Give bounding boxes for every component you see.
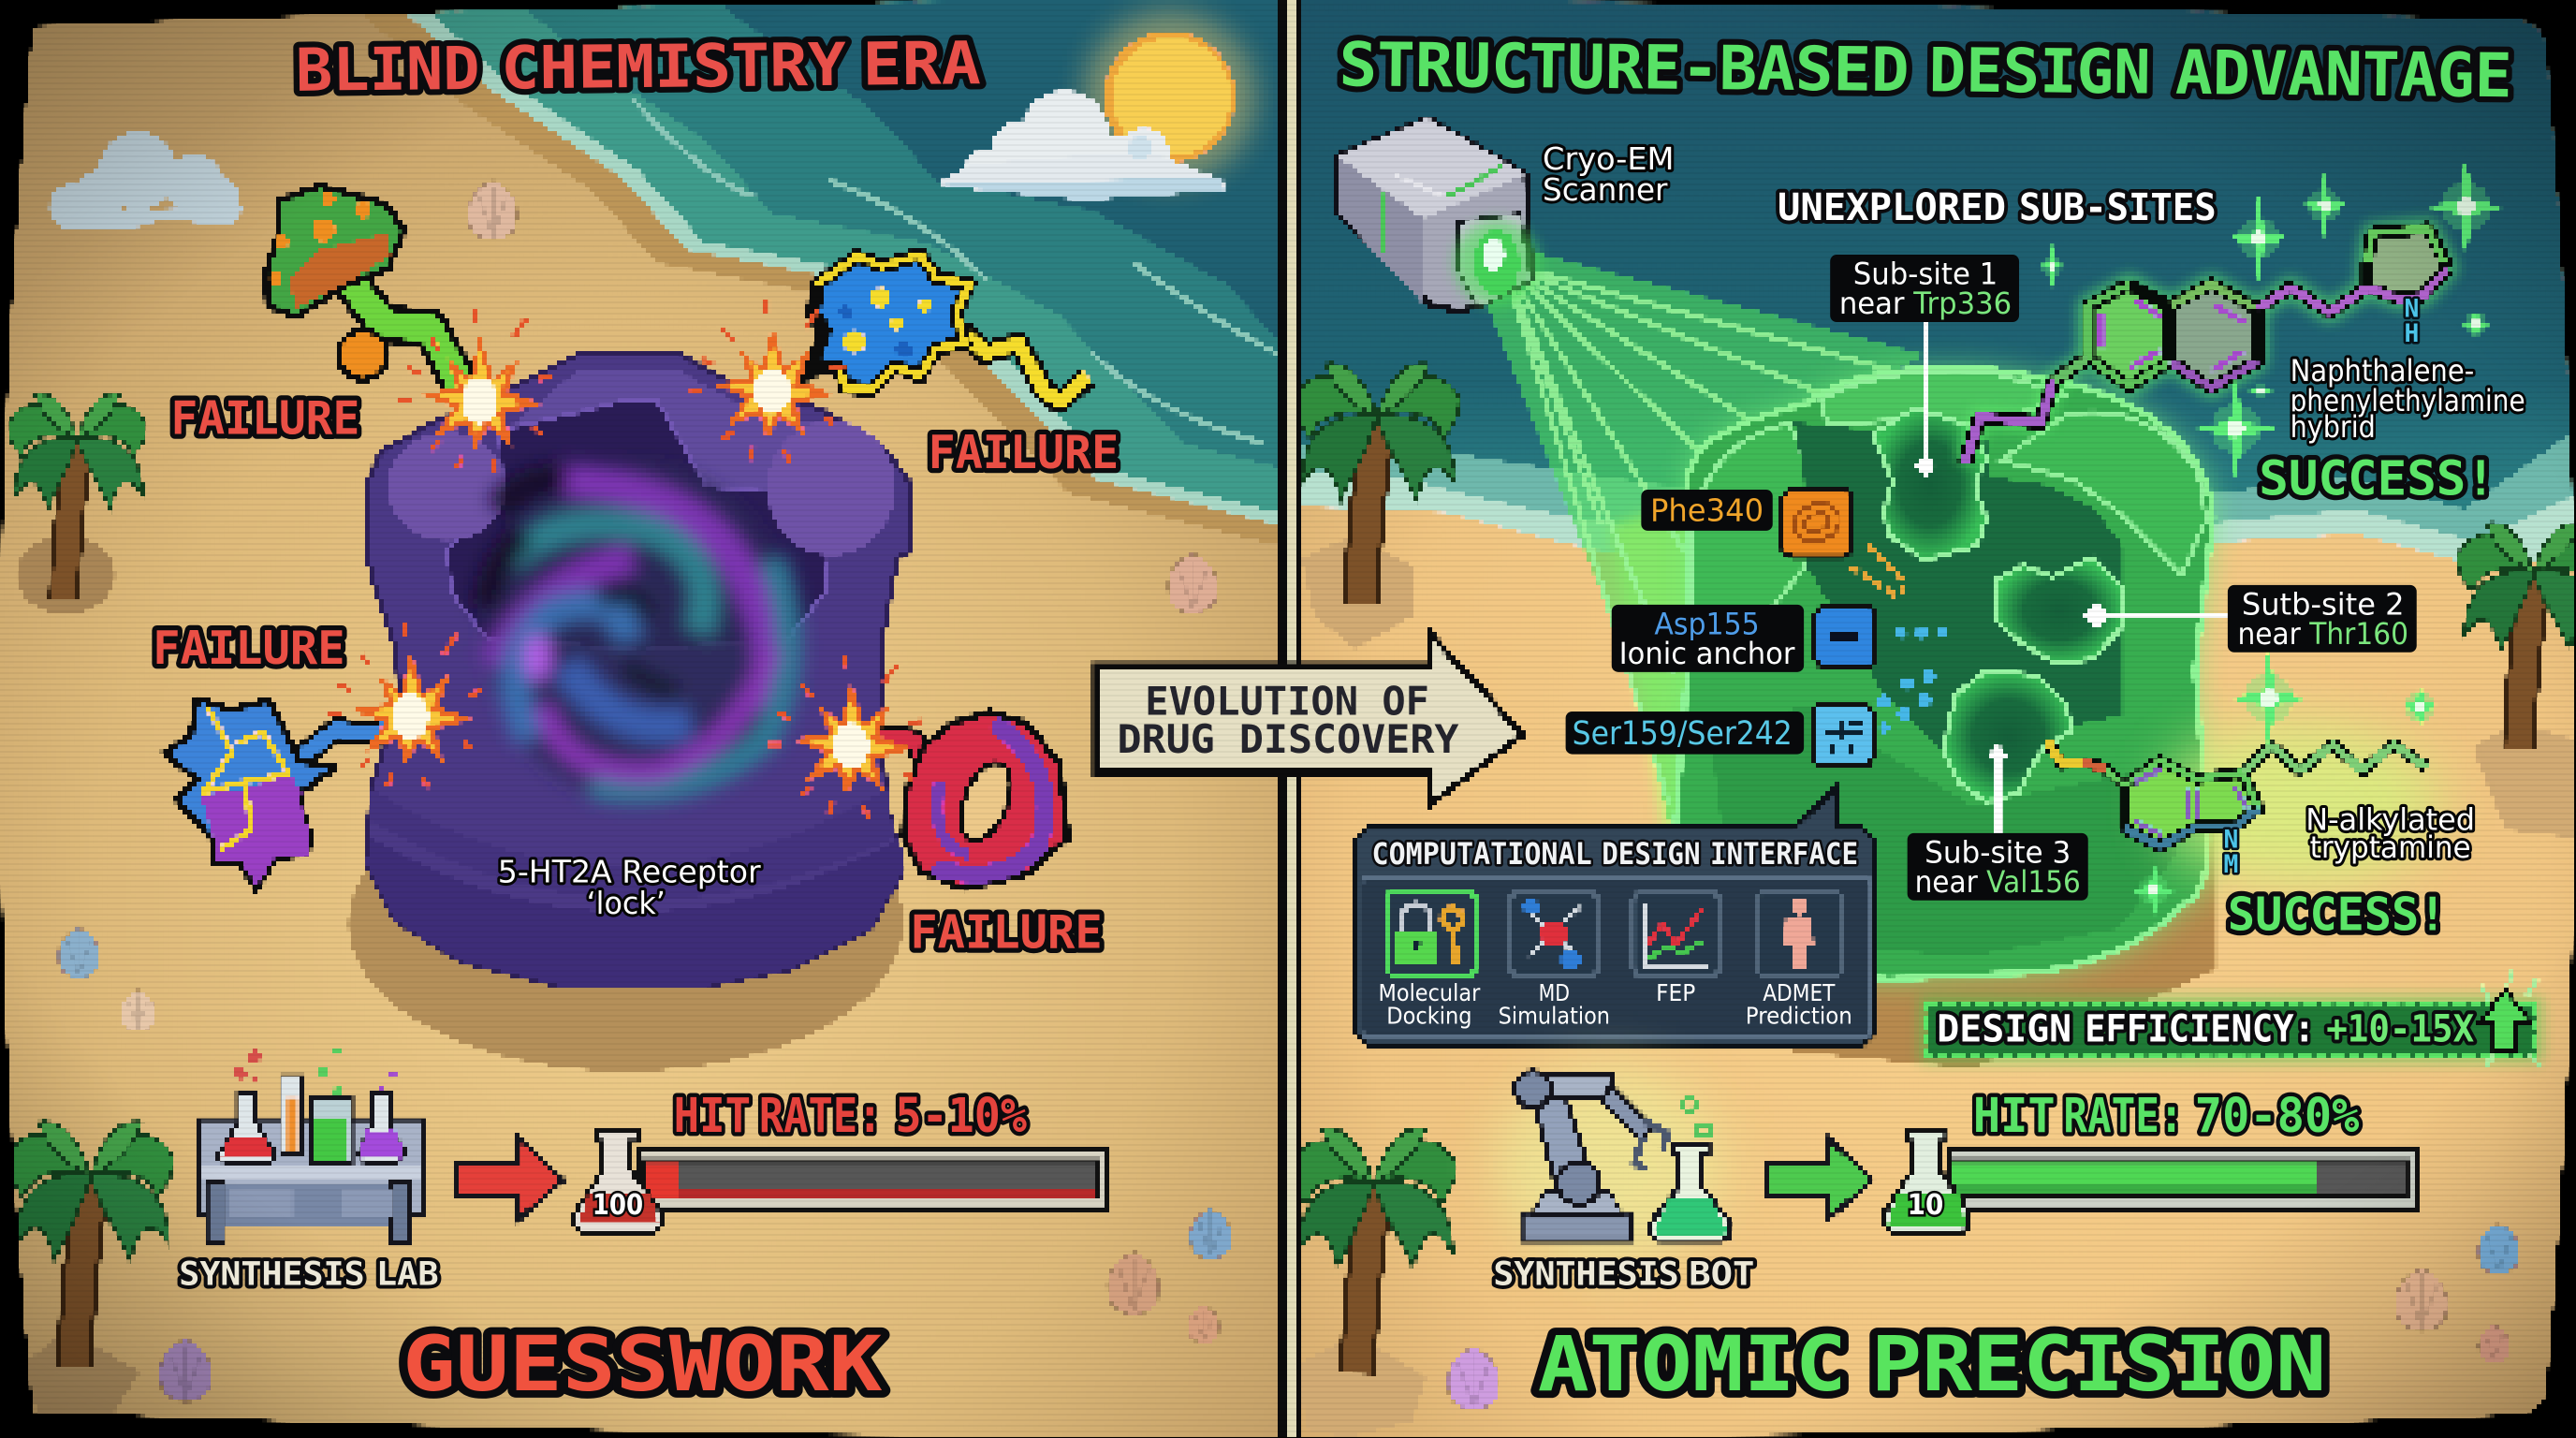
label: receptor lock: 5-HT2A Receptor [498,853,761,889]
label: failure 1: FAILURE [171,390,359,445]
title: structure-based design advantage: DESIGN [1928,36,2151,109]
success 1: SUCCESS! [2259,451,2496,506]
design efficiency text: EFFICIENCY: [2085,1007,2315,1051]
lower receptor shading [1708,707,2177,956]
arrow: green [1766,1138,1873,1219]
label: synthesis lab: LAB [376,1255,439,1293]
heading: guesswork: GUESSWORK [402,1321,883,1409]
label: N-alkylated tryptamine [2305,801,2475,865]
icon: sun [1084,11,1255,183]
interface tile labels: ADMET [1763,979,1836,1006]
receptor shadow [348,775,903,1071]
NH marker 1 [2405,296,2419,348]
heading: atomic precision: PRECISION [1871,1321,2326,1409]
label: receptor lock [498,853,761,921]
label: N-alkylated tryptamine: tryptamine [2310,829,2471,865]
NH marker 2 [2224,827,2238,879]
label: unexplored sub-sites: UNEXPLORED [1778,185,2006,229]
callout: sub-site 3: Sub-site 3 [1925,836,2071,870]
icon: green flask [1649,1144,1732,1240]
success 2: SUCCESS! [2228,887,2446,941]
design efficiency text: DESIGN [1937,1007,2071,1051]
right receptor lobe [2001,412,2206,575]
label: hit rate low: HIT [674,1089,751,1144]
computational interface panel [1354,787,1876,1045]
interface tile labels: Prediction [1746,1002,1852,1029]
interface tile labels [1379,979,1852,1029]
arrow text: evolution of drug discovery: DRUG DISCOVERY [1117,716,1459,762]
label: unexplored sub-sites [1778,185,2217,229]
label: synthesis lab: SYNTHESIS [179,1255,365,1293]
label: hit rate high [1973,1089,2360,1144]
molecule: jagged star [165,698,402,890]
interface tile labels: Docking [1386,1002,1472,1029]
title: structure-based design advantage: ADVANTAGE [2175,38,2512,111]
glowing receptor [1676,368,2213,979]
title: blind chemistry era: CHEMISTRY [501,30,846,103]
label: cryo-EM scanner: Scanner [1543,171,1668,208]
icon: synthesis bot arm [1515,1071,1710,1240]
left receptor lobe [1692,424,1811,657]
label: synthesis lab [179,1255,439,1293]
callout: sub-site 3 [1908,833,2088,901]
NH marker 2: N [2224,827,2238,855]
NH marker 2: M [2224,851,2238,879]
sub-site pocket 2 [1995,557,2124,664]
label: naphthalene hybrid: hybrid [2291,411,2376,445]
icon: cryo-EM scanner [1338,118,1540,312]
callout: sub-site 2: near Thr160 [2237,618,2408,652]
swirl in the blurred pocket [487,465,789,800]
callout pointer lines [1914,320,2228,833]
label: hit rate low: RATE: [759,1089,882,1144]
label: naphthalene hybrid [2291,355,2525,445]
icon: impact burst 2 [690,299,844,463]
pi interaction marks [1852,546,1903,594]
icon: flask 10 [1884,1131,1970,1232]
label: receptor lock: ‘lock’ [587,885,666,921]
label: Phe340: Phe340 [1650,492,1764,528]
panel: blind chemistry era beach scene [0,0,1278,1437]
evolution arrow banner [1096,633,1523,805]
robot glow [1495,1068,1725,1265]
title: blind chemistry era: ERA [862,28,981,99]
label: Asp155 ionic anchor: Asp155 [1654,608,1760,641]
icon: flask 100 [575,1131,663,1232]
title: blind chemistry era: BLIND [296,34,480,105]
callout: sub-site 3: near Val156 [1915,866,2081,900]
icon: impact burst 3 [329,624,483,788]
interface heading [1372,838,1858,872]
icon: Phe340 aromatic tile [1782,490,1852,557]
panel: structure based design beach scene [1290,0,2576,1438]
interface heading: DESIGN [1602,838,1701,872]
tile: molecular docking [1386,890,1475,976]
callout: sub-site 2: Sutb-site 2 [2242,588,2405,622]
label: Ser159/Ser242: Ser159/Ser242 [1573,714,1793,753]
label: synthesis bot [1493,1255,1754,1293]
interface tile labels: Simulation [1499,1002,1610,1029]
divider between panels [1277,0,1301,1438]
NH marker 1: N [2405,296,2419,324]
molecule: red swirl [855,712,1068,889]
icon: efficiency up arrow [2479,970,2543,1068]
tile: ADMET prediction [1756,892,1843,976]
hit rate bar: 70-80% [1945,1145,2419,1211]
design efficiency banner [1919,996,2543,1064]
dark binding core [1794,422,2123,748]
molecule glow on sand [2160,723,2439,888]
icon: white cloud [936,91,1224,200]
hit rate bar: 5-10% [636,1145,1109,1211]
palm tree top left [8,394,146,614]
label: failure 3: FAILURE [153,621,345,675]
shells and pebbles left [58,181,1231,1401]
label: cryo-EM scanner [1543,140,1674,208]
callout: sub-site 1: Sub-site 1 [1853,258,1998,292]
tile: FEP chart [1633,892,1720,976]
molecule: N-alkylated tryptamine [2047,741,2426,846]
palm tree right [2457,523,2576,838]
label: hit rate low [674,1089,1027,1144]
label: failure 2: FAILURE [929,425,1119,479]
flask number 10: 10 [1908,1189,1943,1222]
sparkles [2036,153,2506,923]
arrow: red [457,1138,564,1219]
molecule: mushroom [266,185,468,399]
molecule: spiky blue star [788,255,1088,403]
icon: Asp155 charge tile [1815,607,1875,668]
label: failure 4: FAILURE [910,905,1103,960]
ocean right [1290,0,2576,546]
receptor shadow right [1791,822,2217,1068]
label: naphthalene hybrid: phenylethylamine [2291,385,2525,418]
interface heading: COMPUTATIONAL [1372,838,1592,872]
molecule: naphthalene phenylethylamine hybrid [1965,228,2448,463]
icon: impact burst 1 [398,309,552,473]
title: structure-based design advantage: STRUCTURE-BASED [1339,30,1910,106]
callout: sub-site 1: near Trp336 [1839,287,2012,321]
heading: atomic precision: ATOMIC [1538,1321,1847,1409]
top receptor band [1821,371,2067,424]
icon: Ser159 hydrogen bond tile [1812,705,1873,766]
label: synthesis bot: BOT [1689,1255,1754,1293]
callout: sub-site 2 [2228,585,2417,653]
flask number 100: 100 [593,1189,643,1222]
palm tree bottom left [7,1123,173,1438]
icon: synthesis lab bench [198,1049,422,1242]
shells right [1448,1224,2519,1410]
palm tree upper left [1294,364,1459,649]
arrow text: evolution of drug discovery [1117,678,1459,762]
label: synthesis bot: SYNTHESIS [1493,1255,1679,1293]
label: hit rate high: HIT [1973,1089,2056,1144]
interface tile labels: Molecular [1379,979,1481,1006]
receptor lock body [366,355,910,986]
label: Asp155 ionic anchor [1612,605,1804,672]
design efficiency text: +10-15X [2326,1007,2474,1051]
sub-site pocket 1 [1873,407,1986,560]
icon: faint cloud [46,131,246,230]
sub-site pocket 3 [1943,670,2073,801]
interface tile labels: FEP [1656,979,1695,1006]
title: blind chemistry era [296,28,981,105]
heading: atomic precision [1538,1321,2326,1409]
label: unexplored sub-sites: SUB-SITES [2019,185,2217,229]
label: hit rate low: 5-10% [896,1089,1027,1144]
design efficiency text [1937,1007,2474,1051]
label: hit rate high: RATE: [2063,1089,2184,1144]
interface tile labels: MD [1539,979,1570,1006]
label: hit rate high: 70-80% [2195,1089,2360,1144]
interface heading: INTERFACE [1710,838,1858,872]
scanner beam [1486,243,1925,846]
label: cryo-EM scanner: Cryo-EM [1543,140,1674,177]
tile: MD simulation [1510,892,1599,976]
callout: sub-site 1 [1830,255,2019,322]
title: structure-based design advantage [1339,30,2512,111]
label: Asp155 ionic anchor: Ionic anchor [1619,638,1794,671]
ionic dots [1878,626,1947,733]
arrow text: evolution of drug discovery: EVOLUTION OF [1145,678,1429,724]
label: naphthalene hybrid: Naphthalene- [2291,355,2474,389]
label: N-alkylated tryptamine: N-alkylated [2305,801,2475,837]
NH marker 1: H [2405,320,2419,348]
palm tree lower left [1291,1129,1456,1438]
icon: impact burst 4 [768,654,923,818]
